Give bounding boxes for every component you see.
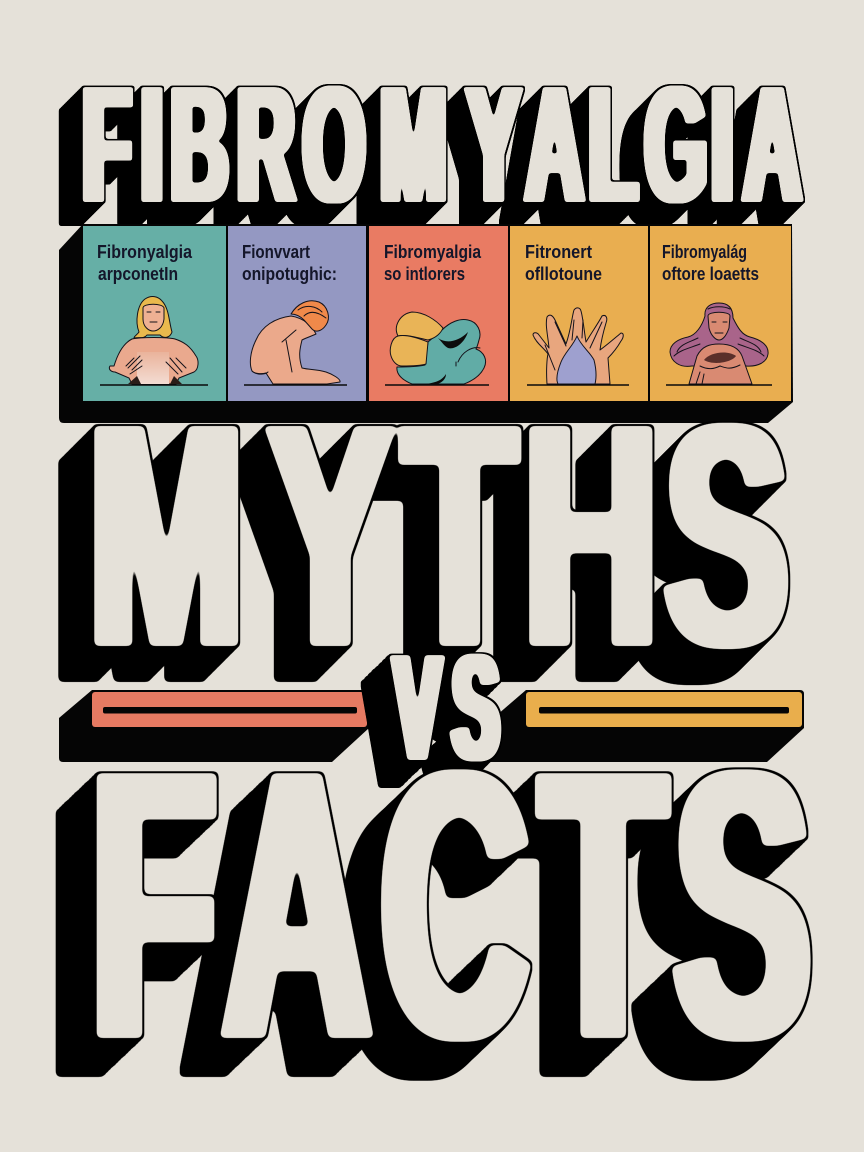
word: VS: VS (394, 624, 499, 790)
panel 2: lavender card (228, 226, 366, 401)
panel 1: teal card (83, 226, 226, 401)
panel 5: amber card (650, 226, 791, 401)
strip extrusion (59, 224, 793, 423)
panel 3 caption: Fibromyalgia (384, 242, 482, 262)
icon: person bent forward (244, 301, 347, 385)
icon: curled abstract figure (385, 312, 489, 385)
ground line (527, 384, 629, 386)
bar: right amber divider (490, 690, 804, 762)
panel 2 caption: Fionvvart (242, 242, 310, 262)
panel 3: coral card (369, 226, 508, 401)
panel 4: amber card (510, 226, 648, 401)
panel 2 caption: onipotughic: (242, 264, 337, 284)
ground line (244, 384, 347, 386)
panel 4 caption: ofllotoune (525, 264, 602, 284)
panel 1 caption: arpconetIn (98, 264, 178, 284)
icon: hands around a drop (527, 308, 629, 385)
panel 5 caption: oftore loaetts (662, 264, 759, 284)
ground line (666, 384, 772, 386)
bar: left coral divider (59, 690, 369, 762)
panel 4 caption: Fitronert (525, 242, 592, 262)
panel 5 caption (662, 242, 759, 284)
panel 2 caption (242, 242, 337, 284)
icon: woman holding chest (100, 297, 208, 385)
ground line (100, 384, 208, 386)
panel 1 caption: Fibronyalgia (97, 242, 193, 262)
title: FIBROMYALGIA: FIBROMYALGIA (82, 53, 801, 237)
title: FACTS: FACTS (91, 693, 811, 1117)
icon: woman with long hair (666, 303, 772, 385)
panel 4 caption (525, 242, 602, 284)
panel 3 caption: so intlorers (384, 264, 465, 284)
panel 5 caption: Fibromyalág (662, 242, 747, 262)
panel 3 caption (384, 242, 482, 284)
ground line (385, 384, 489, 386)
panel strip with five illustrated cards (59, 224, 793, 423)
title: MYTHS: MYTHS (89, 360, 788, 711)
panel 1 caption (97, 242, 193, 284)
